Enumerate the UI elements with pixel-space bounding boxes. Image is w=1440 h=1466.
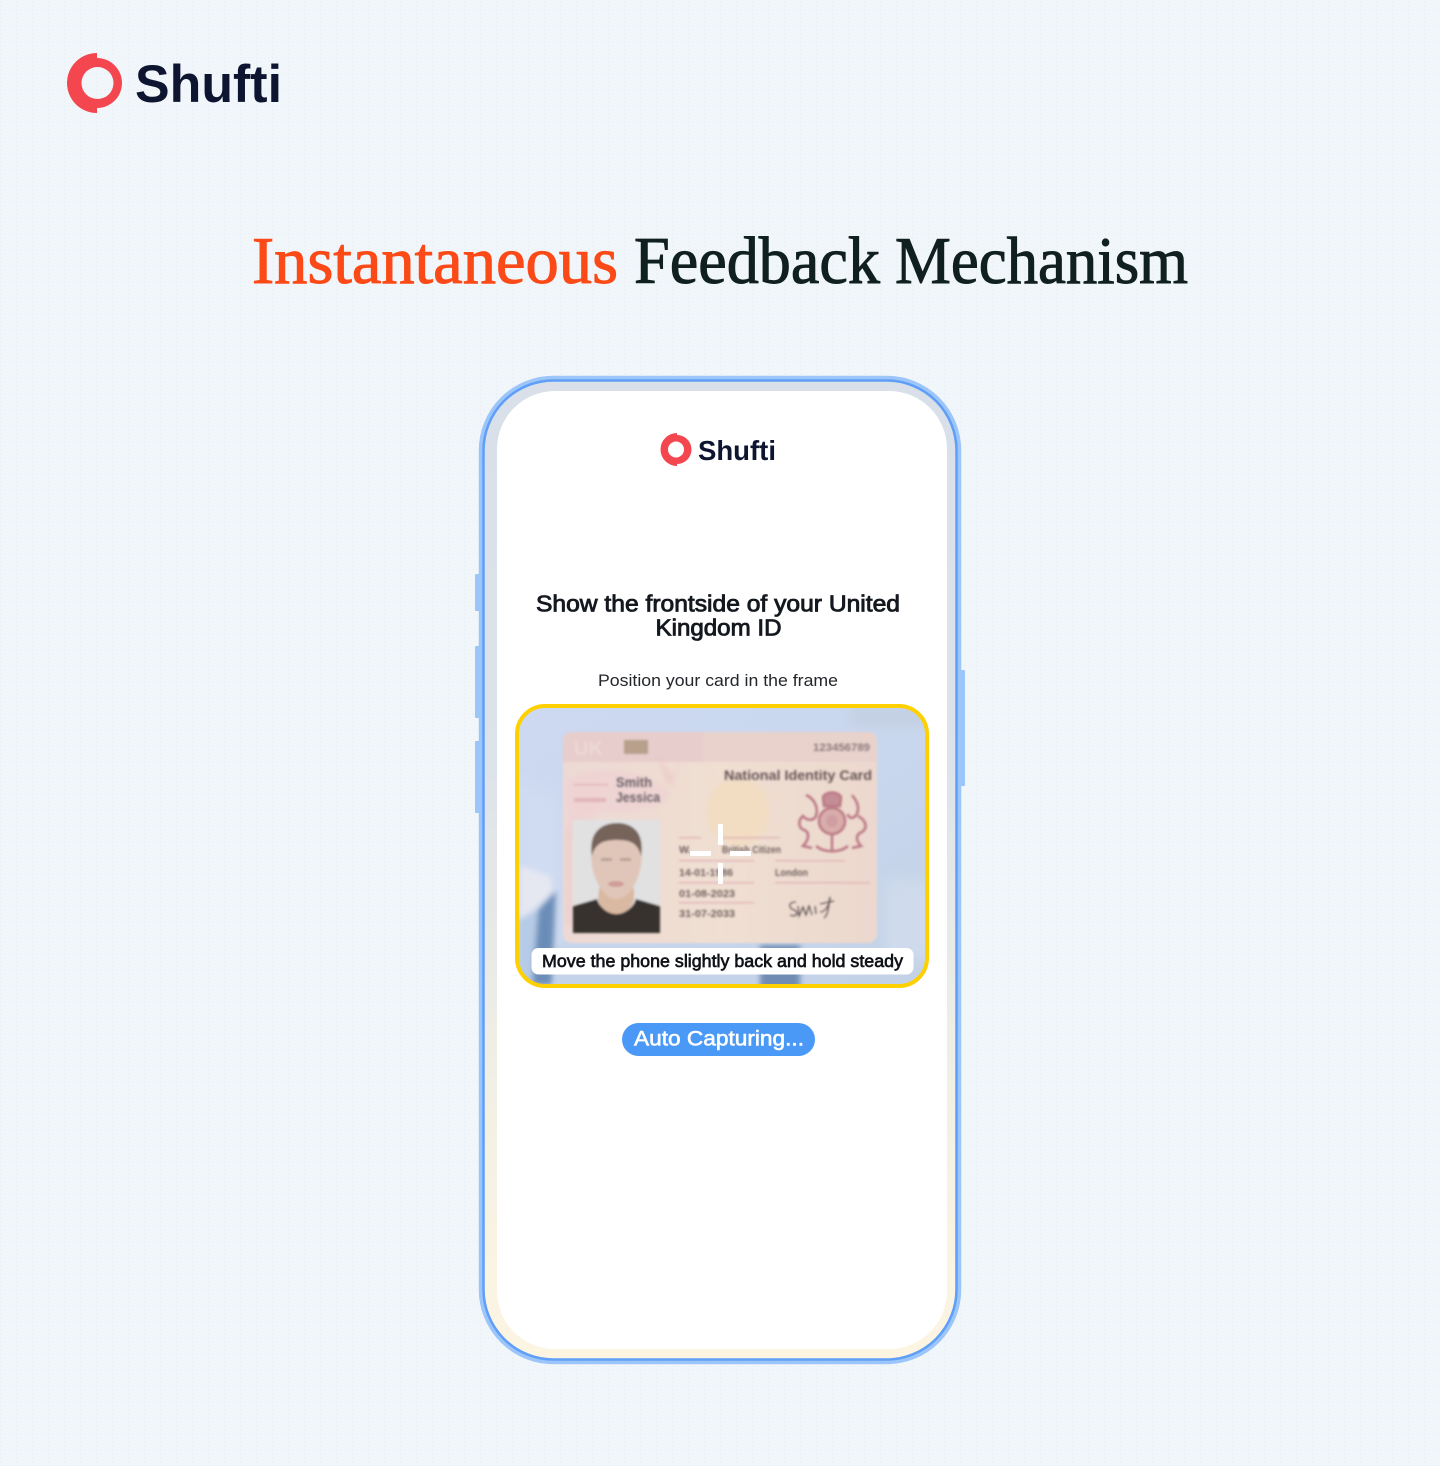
- camera frame: [515, 704, 935, 990]
- instruction heading: [536, 590, 900, 640]
- title: Feedback: [634, 224, 880, 298]
- card text: 14-01-1986: [679, 867, 733, 879]
- blurred camera background: [515, 704, 935, 990]
- motto ribbon: [816, 846, 848, 851]
- screen logo: [660, 433, 776, 466]
- status pill: Auto Capturing...: [634, 1028, 804, 1050]
- card text: British Citizen: [722, 844, 781, 856]
- phone mockup: [475, 378, 965, 1362]
- signature: [790, 897, 834, 918]
- phone frame: [482, 378, 958, 1362]
- instruction heading: Kingdom ID: [656, 614, 782, 640]
- holder name: Smith: [616, 775, 652, 790]
- crown: [823, 792, 841, 806]
- logo wordmark: Shufti: [135, 55, 282, 114]
- UK mark: UK: [574, 738, 603, 760]
- card text: 01-08-2023: [679, 888, 735, 900]
- feedback message: [532, 948, 914, 974]
- lion: [799, 795, 817, 848]
- small wordmark: Shufti: [698, 435, 776, 466]
- phone side buttons: [475, 574, 965, 813]
- card text: 31-07-2033: [679, 908, 735, 920]
- feedback message: Move the phone slightly back and hold steady: [542, 951, 903, 971]
- card number: 123456789: [813, 742, 870, 754]
- shield: [819, 808, 845, 834]
- instruction heading: Show the frontside of your United: [536, 590, 900, 616]
- status pill: [622, 1023, 815, 1056]
- card text: London: [775, 867, 808, 879]
- title: Mechanism: [895, 224, 1188, 298]
- coat of arms: [799, 792, 865, 851]
- card title: National Identity Card: [724, 767, 872, 783]
- yellow frame border: [517, 706, 927, 986]
- focus crosshair: [690, 824, 751, 884]
- card fields: [574, 784, 870, 904]
- title: Instantaneous: [252, 224, 618, 298]
- identity card: [563, 732, 877, 943]
- card text: W.: [679, 844, 691, 856]
- ID portrait: [573, 820, 660, 933]
- phone screen: [497, 391, 947, 1349]
- chip: [624, 740, 648, 754]
- logo: Shufti: [67, 53, 282, 114]
- title: [252, 224, 1188, 298]
- icon: Shufti ring: [67, 53, 122, 113]
- icon: small Shufti ring: [660, 433, 692, 466]
- card text: Jessica: [616, 790, 660, 805]
- unicorn: [848, 795, 865, 848]
- card text: [574, 738, 872, 920]
- instruction subtext: Position your card in the frame: [598, 671, 838, 690]
